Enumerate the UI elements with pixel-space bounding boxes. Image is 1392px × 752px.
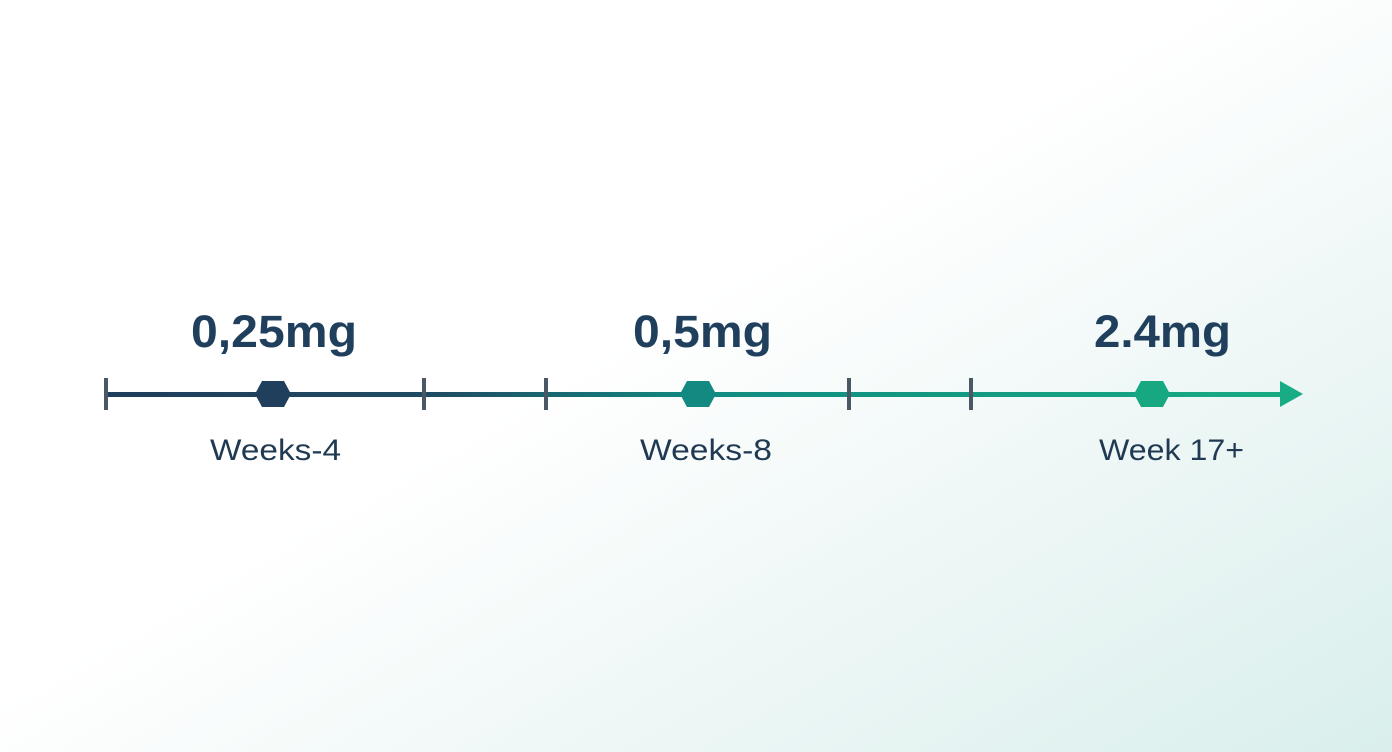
- timeline axis line: [106, 381, 1303, 407]
- milestone 1: 0,25mg: Weeks-4: [210, 434, 341, 467]
- milestone 3: 2.4mg: 2.4mg: [1094, 306, 1231, 357]
- milestone 3: 2.4mg: Week 17+: [1099, 434, 1244, 467]
- milestone 1: 0,25mg: [191, 306, 357, 467]
- milestone 2: 0,5mg: [633, 306, 772, 467]
- milestone 2: 0,5mg: 0,5mg: [633, 306, 772, 357]
- milestone 1: 0,25mg: 0,25mg: [191, 306, 357, 357]
- tick marks: [104, 378, 973, 410]
- milestone 2: 0,5mg: Weeks-8: [640, 434, 772, 467]
- milestone 3: 2.4mg: [1094, 306, 1244, 467]
